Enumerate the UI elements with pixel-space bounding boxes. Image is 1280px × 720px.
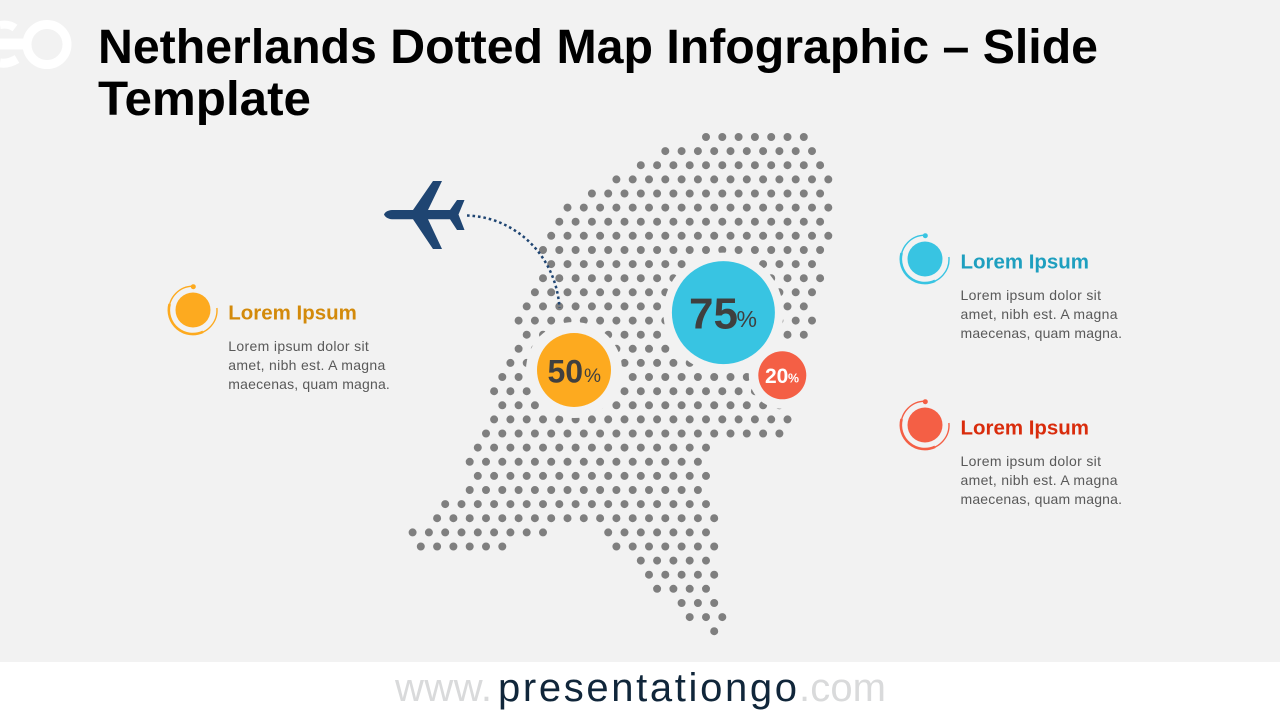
heading: Lorem Ipsum (960, 418, 1089, 440)
body text (228, 338, 390, 392)
bubble: 20 percent: % (788, 370, 799, 386)
icon: blue target (901, 233, 949, 283)
bubble: 75 percent: % (736, 306, 757, 332)
callout: orange, left (169, 284, 390, 392)
body text: Lorem ipsum dolor sit (960, 453, 1101, 469)
footer band with website address: presentationgo (498, 666, 797, 710)
callout: red, right bottom (901, 399, 1122, 507)
bubble: 75 percent: 75 (689, 290, 738, 338)
body text (960, 287, 1122, 341)
icon: orange target (169, 284, 217, 334)
dotted map of the Netherlands (413, 137, 829, 631)
bubble: 50 percent: 50 (548, 354, 583, 390)
callout: blue, right top (901, 233, 1122, 341)
bubble: 20 percent: 20 (765, 365, 788, 388)
heading: Lorem Ipsum (228, 302, 357, 324)
title: Netherlands Dotted Map Infographic – Slide (98, 21, 1098, 74)
bubble: 50 percent: % (584, 366, 601, 387)
body text: Lorem ipsum dolor sit (960, 287, 1101, 303)
body text: maecenas, quam magna. (960, 491, 1122, 507)
bubble: 50 percent (537, 333, 611, 407)
body text: Lorem ipsum dolor sit (228, 338, 369, 354)
body text: amet, nibh est. A magna (228, 357, 386, 373)
footer band with website address: www. (394, 666, 492, 710)
logo fragment (0, 24, 67, 64)
bubble: 75 percent (672, 261, 775, 364)
airplane icon (384, 181, 464, 249)
body text (960, 453, 1122, 507)
footer band with website address (0, 662, 1280, 720)
icon: red target (901, 399, 949, 449)
footer band with website address: .com (799, 666, 886, 710)
heading: Lorem Ipsum (960, 252, 1089, 274)
title (98, 21, 1098, 126)
title: Template (98, 73, 311, 126)
halos around the percentage bubbles (526, 253, 816, 418)
dotted flight path arrow (467, 216, 560, 308)
body text: maecenas, quam magna. (228, 376, 390, 392)
body text: maecenas, quam magna. (960, 325, 1122, 341)
body text: amet, nibh est. A magna (960, 306, 1118, 322)
body text: amet, nibh est. A magna (960, 472, 1118, 488)
bubble: 20 percent (758, 351, 806, 399)
